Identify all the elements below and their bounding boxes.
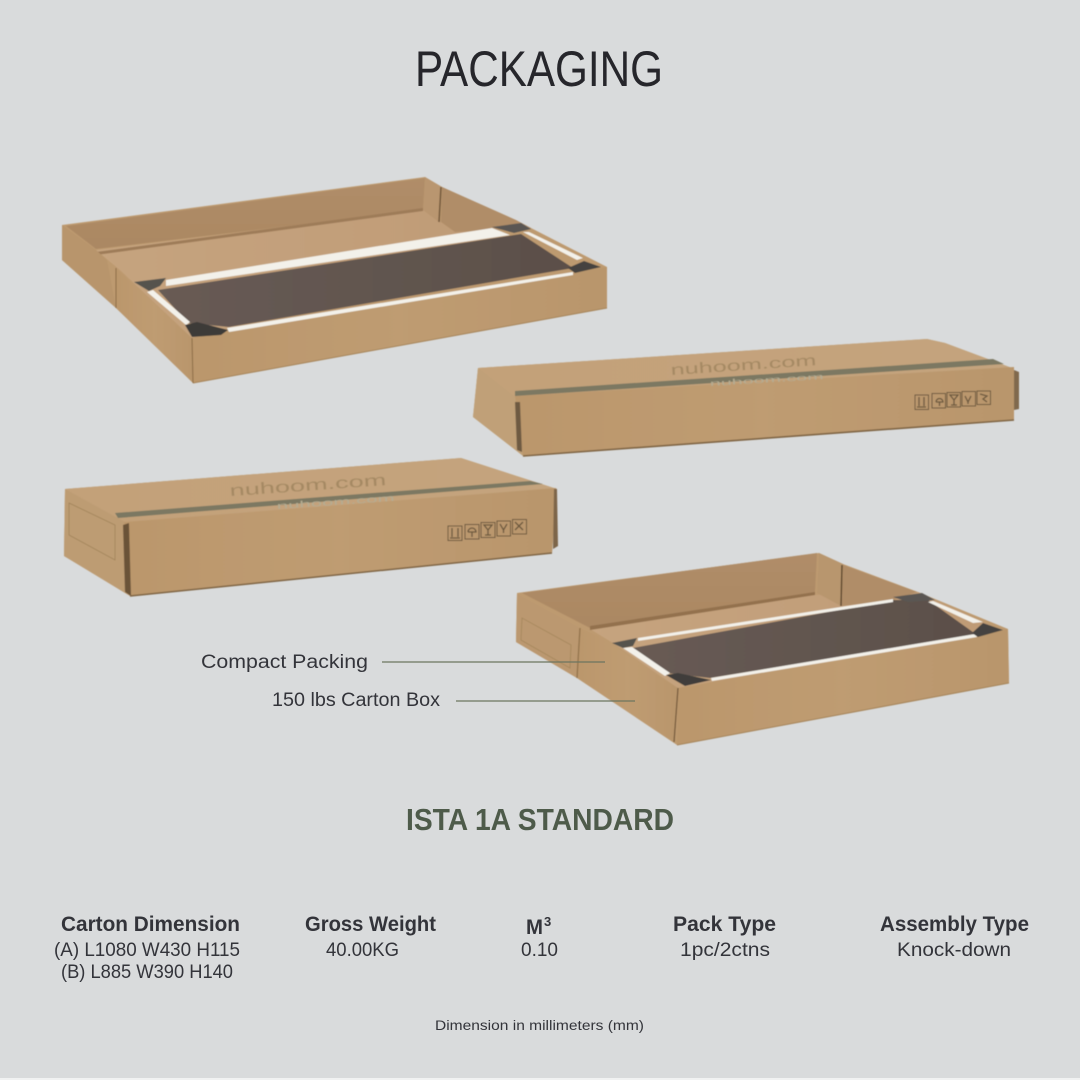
- standard heading: ISTA 1A STANDARD: [406, 803, 674, 837]
- handling icons: [448, 520, 526, 540]
- foam strips: [623, 599, 983, 681]
- closed carton right: [473, 339, 1019, 456]
- spec: carton dimension: [54, 913, 240, 983]
- closed carton right: nuhoom.com: [710, 372, 825, 388]
- spec: gross weight: [305, 913, 436, 961]
- callout: compact packing: Compact Packing: [201, 652, 368, 673]
- corner protectors: [134, 223, 601, 337]
- spec: volume: 0.10: [521, 940, 558, 961]
- spec: gross weight: 40.00KG: [326, 940, 399, 961]
- spec: carton dimension: (B) L885 W390 H140: [61, 962, 233, 983]
- wood plank: [158, 234, 573, 327]
- wood plank: [633, 600, 977, 678]
- brand text: nuhoom.com: [670, 352, 817, 379]
- foam strips: [147, 228, 583, 332]
- closed carton left: nuhoom.com: [276, 493, 395, 511]
- spec: carton dimension: Carton Dimension: [61, 913, 240, 936]
- closed carton left: [64, 458, 558, 596]
- spec: volume: M: [526, 916, 543, 939]
- spec: assembly type: Knock-down: [897, 940, 1011, 961]
- brand text: nuhoom.com: [229, 472, 387, 500]
- spec: pack type: Pack Type: [673, 913, 776, 936]
- spec: volume: [521, 914, 558, 961]
- open carton top left: [62, 177, 607, 383]
- spec: assembly type: [880, 913, 1029, 961]
- footnote: Dimension in millimeters (mm): [435, 1018, 644, 1033]
- spec: assembly type: Assembly Type: [880, 913, 1029, 936]
- spec: carton dimension: (A) L1080 W430 H115: [54, 940, 240, 961]
- spec: pack type: [673, 913, 776, 961]
- spec: pack type: 1pc/2ctns: [680, 940, 770, 961]
- title: PACKAGING: [415, 41, 663, 97]
- open carton bottom right: [516, 553, 1009, 745]
- callout: carton box: 150 lbs Carton Box: [272, 690, 441, 711]
- spec: volume: 3: [544, 914, 551, 929]
- spec: gross weight: Gross Weight: [305, 913, 436, 936]
- handling icons: [915, 391, 990, 410]
- corner protectors: [612, 593, 1003, 686]
